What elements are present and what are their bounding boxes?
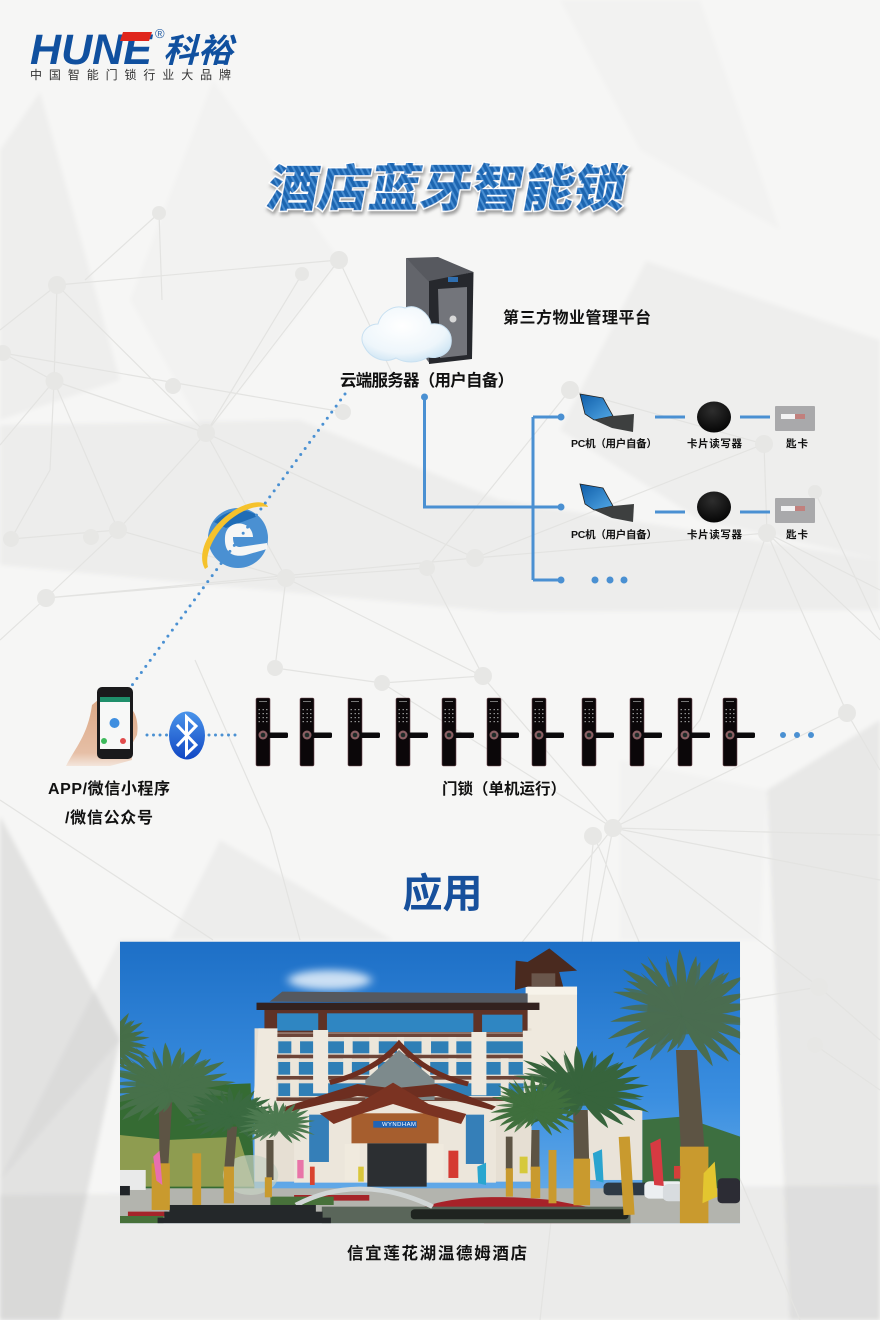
label: PC: PC机（用户自备） [571,437,657,450]
central gables [280,1044,496,1187]
floors [276,1033,526,1101]
hand [66,700,138,766]
lock 3 [348,698,380,766]
icon: internet browser [202,502,268,569]
label: door locks: 门锁（单机运行） [442,779,566,798]
lock 6 [487,698,519,766]
label: cloud server: 云端服务器（用户自备） [340,370,514,390]
logo red bar [120,32,152,41]
connector: server to PC branches [421,394,564,584]
flags [153,1138,718,1203]
screen [100,697,130,749]
roof [270,992,528,1003]
label: reader: 卡片读写器 [687,437,742,450]
logo chinese name: 科裕 [163,32,237,69]
heading: application: 应用 [402,872,482,916]
icon: laptop [580,394,634,432]
dotted link: phone to bluetooth [147,734,168,736]
title: 酒店蓝牙智能锁 [263,160,632,217]
label: reader: 卡片读写器 [687,528,742,541]
top windows [264,1010,528,1033]
fountain spray [223,1155,278,1195]
network nodes [0,206,856,1053]
ground [120,1188,740,1223]
hotel sign [373,1121,417,1128]
logo: HUNE 科裕 [30,26,237,82]
icon: key card [775,498,815,523]
caption: hotel name: 信宜莲花湖温德姆酒店 [347,1243,527,1263]
label: card: 匙卡 [786,437,808,450]
connector dots [421,394,564,584]
hotel body [253,992,642,1182]
door locks row [256,698,755,766]
hills [120,1083,255,1193]
logo tagline: 中国智能门锁行业大品牌 [30,67,231,82]
icon: bluetooth [169,712,205,760]
columns [253,1028,539,1113]
dash [655,510,685,514]
hotel tower [515,948,577,1087]
hotel sign: WYNDHAM [382,1122,416,1128]
lock 10 [678,698,710,766]
lock 7 [532,698,564,766]
label: card: 匙卡 [786,528,808,541]
icon: key card [775,406,815,431]
lock 8 [582,698,614,766]
pond [322,1207,630,1223]
logo wordmark: HUNE [30,26,153,74]
row: PC 2 [571,484,815,541]
bridge [296,1189,433,1207]
icon: card reader [697,402,731,432]
dash [740,510,770,514]
lock 5 [442,698,474,766]
ellipsis: more locks [780,732,814,738]
icon: laptop [580,484,634,522]
dash [740,416,770,418]
icon: cloud [362,307,451,362]
icon: card reader [697,492,731,522]
palms [120,949,740,1191]
clouds [288,970,371,990]
label: PC: PC机（用户自备） [571,528,657,541]
dotted link: phone to cloud [130,394,345,688]
dotted link: bluetooth to locks [209,734,236,736]
label: app: APP/微信小程序 [48,779,170,798]
gold trunk wraps [152,1136,708,1223]
ellipsis: more PCs [592,576,628,584]
lock 2 [300,698,332,766]
dash [655,416,685,418]
phone [97,687,133,759]
flower beds [421,1197,630,1223]
lock 9 [630,698,662,766]
registered mark: ® [155,26,165,41]
lock 11 [723,698,755,766]
label: wechat account: /微信公众号 [65,809,153,827]
row: PC 1 [571,394,815,450]
fountain steps [158,1205,331,1223]
lock 1 [256,698,288,766]
lock 4 [396,698,428,766]
photo: hotel [120,942,740,1224]
cars [120,1170,740,1203]
label: third party platform: 第三方物业管理平台 [503,308,651,327]
icon: hand holding phone [66,687,138,766]
icon: server tower [406,257,474,364]
